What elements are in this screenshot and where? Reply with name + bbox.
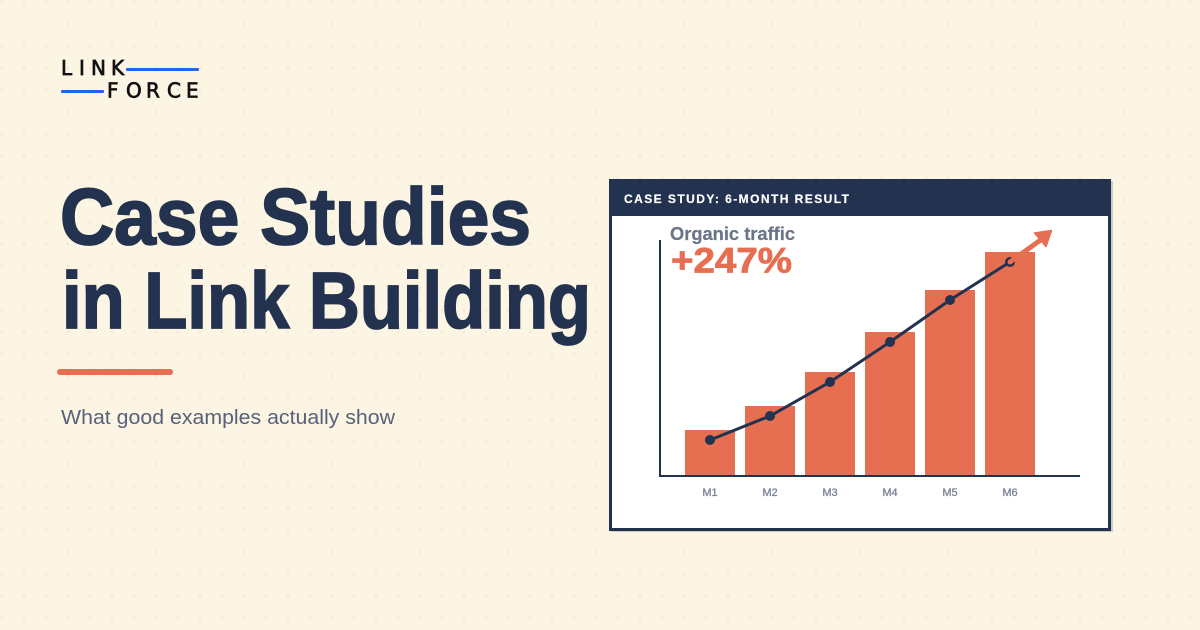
logo: Link Force: FORCE <box>107 78 199 102</box>
month labels: M2 <box>762 487 778 499</box>
card header: CASE STUDY: 6-MONTH RESULT <box>624 192 850 206</box>
arrow <box>1008 230 1052 264</box>
month labels: M4 <box>882 487 898 499</box>
bar chart <box>660 230 1080 499</box>
panel: case study card <box>609 179 1113 532</box>
metric label: Organic traffic <box>670 224 795 244</box>
month labels <box>702 487 1018 499</box>
accent rule <box>57 369 173 375</box>
logo: Link Force <box>61 56 199 102</box>
card header <box>609 179 1111 216</box>
trend line <box>705 257 1015 445</box>
month labels: M5 <box>942 487 958 499</box>
title <box>60 172 591 345</box>
subtitle: What good examples actually show <box>61 407 396 429</box>
month labels: M3 <box>822 487 838 499</box>
month labels: M6 <box>1002 487 1018 499</box>
title: Case Studies <box>60 172 531 261</box>
month labels: M1 <box>702 487 718 499</box>
axes <box>660 240 1080 476</box>
metric value: +247% <box>671 242 792 280</box>
title: in Link Building <box>62 256 591 345</box>
bars <box>685 252 1035 476</box>
logo: Link Force: LINK <box>61 56 125 80</box>
